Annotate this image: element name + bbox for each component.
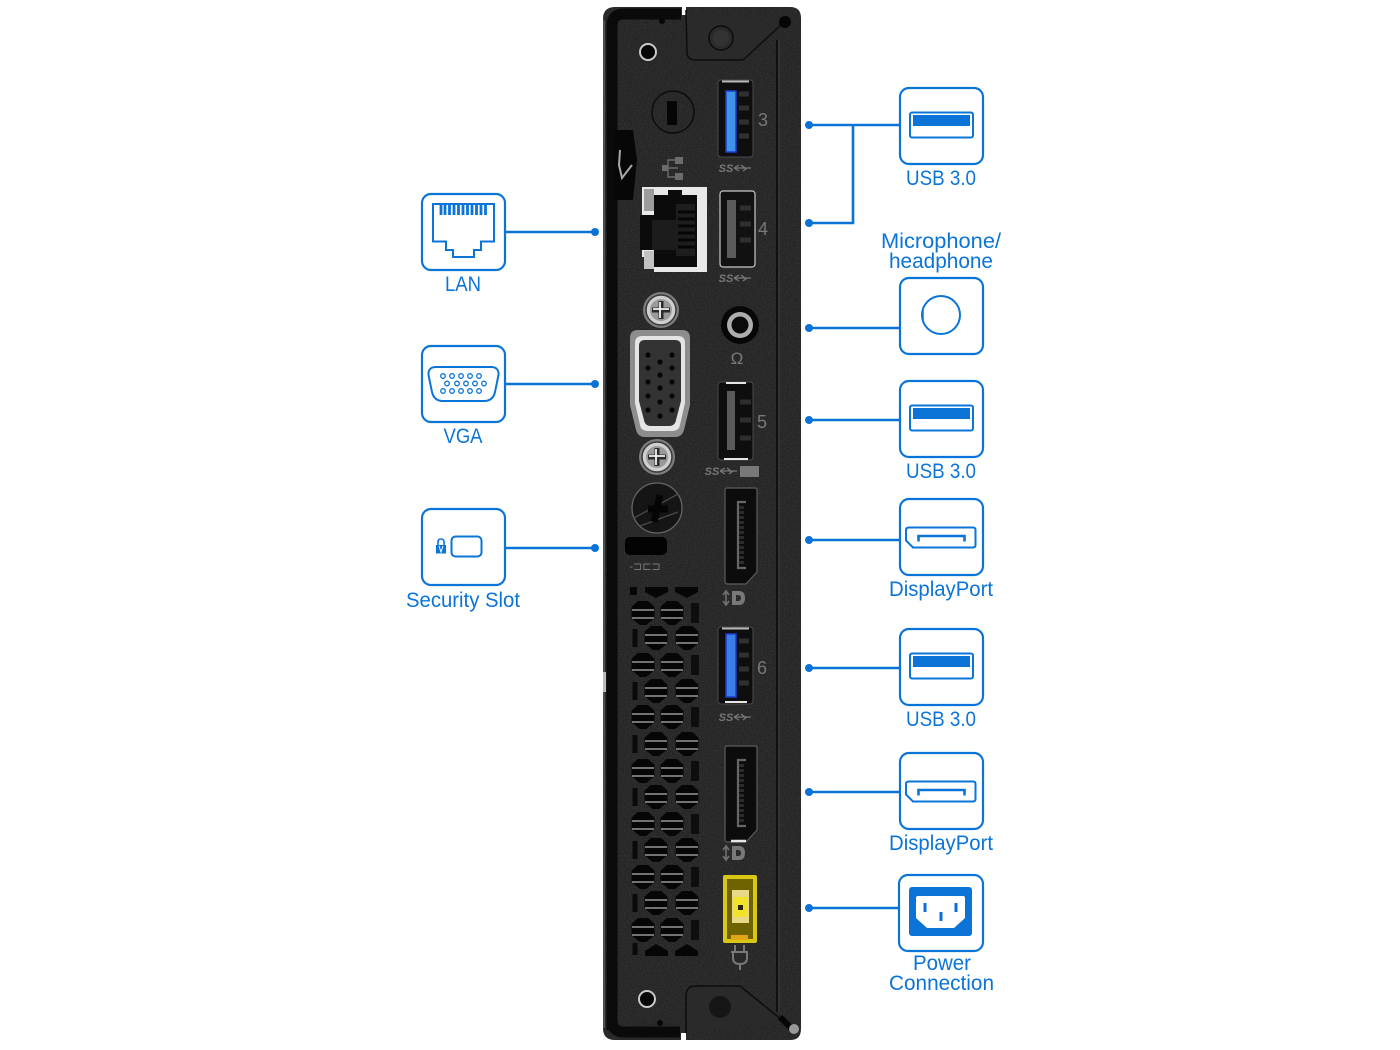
callout: DisplayPort upper: DisplayPort [889,578,993,601]
black slot: -⊐⊏⊐ [629,561,661,573]
icon: power socket [909,887,972,936]
USB port 4: 4 [758,219,768,239]
callout: USB 3.0 middle: USB 3.0 [906,460,976,483]
callout: Power Connection [805,875,994,995]
yellow power port [723,875,757,970]
USB port 5: 5 [757,412,767,432]
callout: Microphone/headphone: headphone [889,250,993,273]
audio jack: Ω [731,349,743,368]
network icon [662,157,683,180]
callout: USB 3.0 lower: USB 3.0 [906,708,976,731]
bottom mounting tab [686,986,799,1034]
LAN port [640,187,707,272]
icon: LAN socket [433,204,494,257]
icon: USB socket [910,406,973,430]
icon: USB socket [910,112,973,138]
DisplayPort 2 [723,746,757,860]
callout: Microphone/headphone: Microphone/ [881,230,1001,253]
callout: Power Connection: Connection [889,972,994,995]
audio jack [721,306,759,368]
top mounting tab [686,10,791,60]
callout: Security Slot [406,509,599,612]
callout: Security Slot: Security Slot [406,589,520,612]
lock knob [652,91,694,133]
DisplayPort 1 [723,488,757,605]
callout: USB 3.0 lower [805,629,983,731]
VGA port [630,292,690,475]
callout: DisplayPort lower: DisplayPort [889,832,993,855]
mounting holes [639,18,665,1026]
callout: USB 3.0 top, two ports: USB 3.0 [906,167,976,190]
callout: LAN: LAN [445,273,481,296]
black screw [632,483,682,533]
device: rear chassis of mini PC [603,7,801,1040]
icon: DisplayPort socket [906,528,976,548]
callout: Microphone/headphone [805,230,1001,354]
USB port 6 [718,627,767,724]
callout: Power Connection: Power [913,952,971,975]
icon: DisplayPort socket [906,782,976,802]
callout: DisplayPort lower [805,753,993,855]
USB port 4 [719,191,768,285]
side latch [615,130,637,200]
USB port 3 [718,80,768,175]
callout: VGA: VGA [444,425,482,448]
icon: audio jack [922,296,960,334]
USB port 3: 3 [758,110,768,130]
USB port 6: 6 [757,658,767,678]
callout: LAN [422,194,599,296]
icon: VGA connector [428,367,499,401]
callout: USB 3.0 middle [805,381,983,483]
USB port 5 [705,382,767,478]
icon: lock and slot [436,536,482,556]
callout: VGA [422,346,599,448]
callout: USB 3.0 top, two ports [805,88,983,227]
vent grille [630,587,698,956]
icon: USB socket [910,654,973,678]
black slot [625,537,667,573]
callout: DisplayPort upper [805,499,993,601]
